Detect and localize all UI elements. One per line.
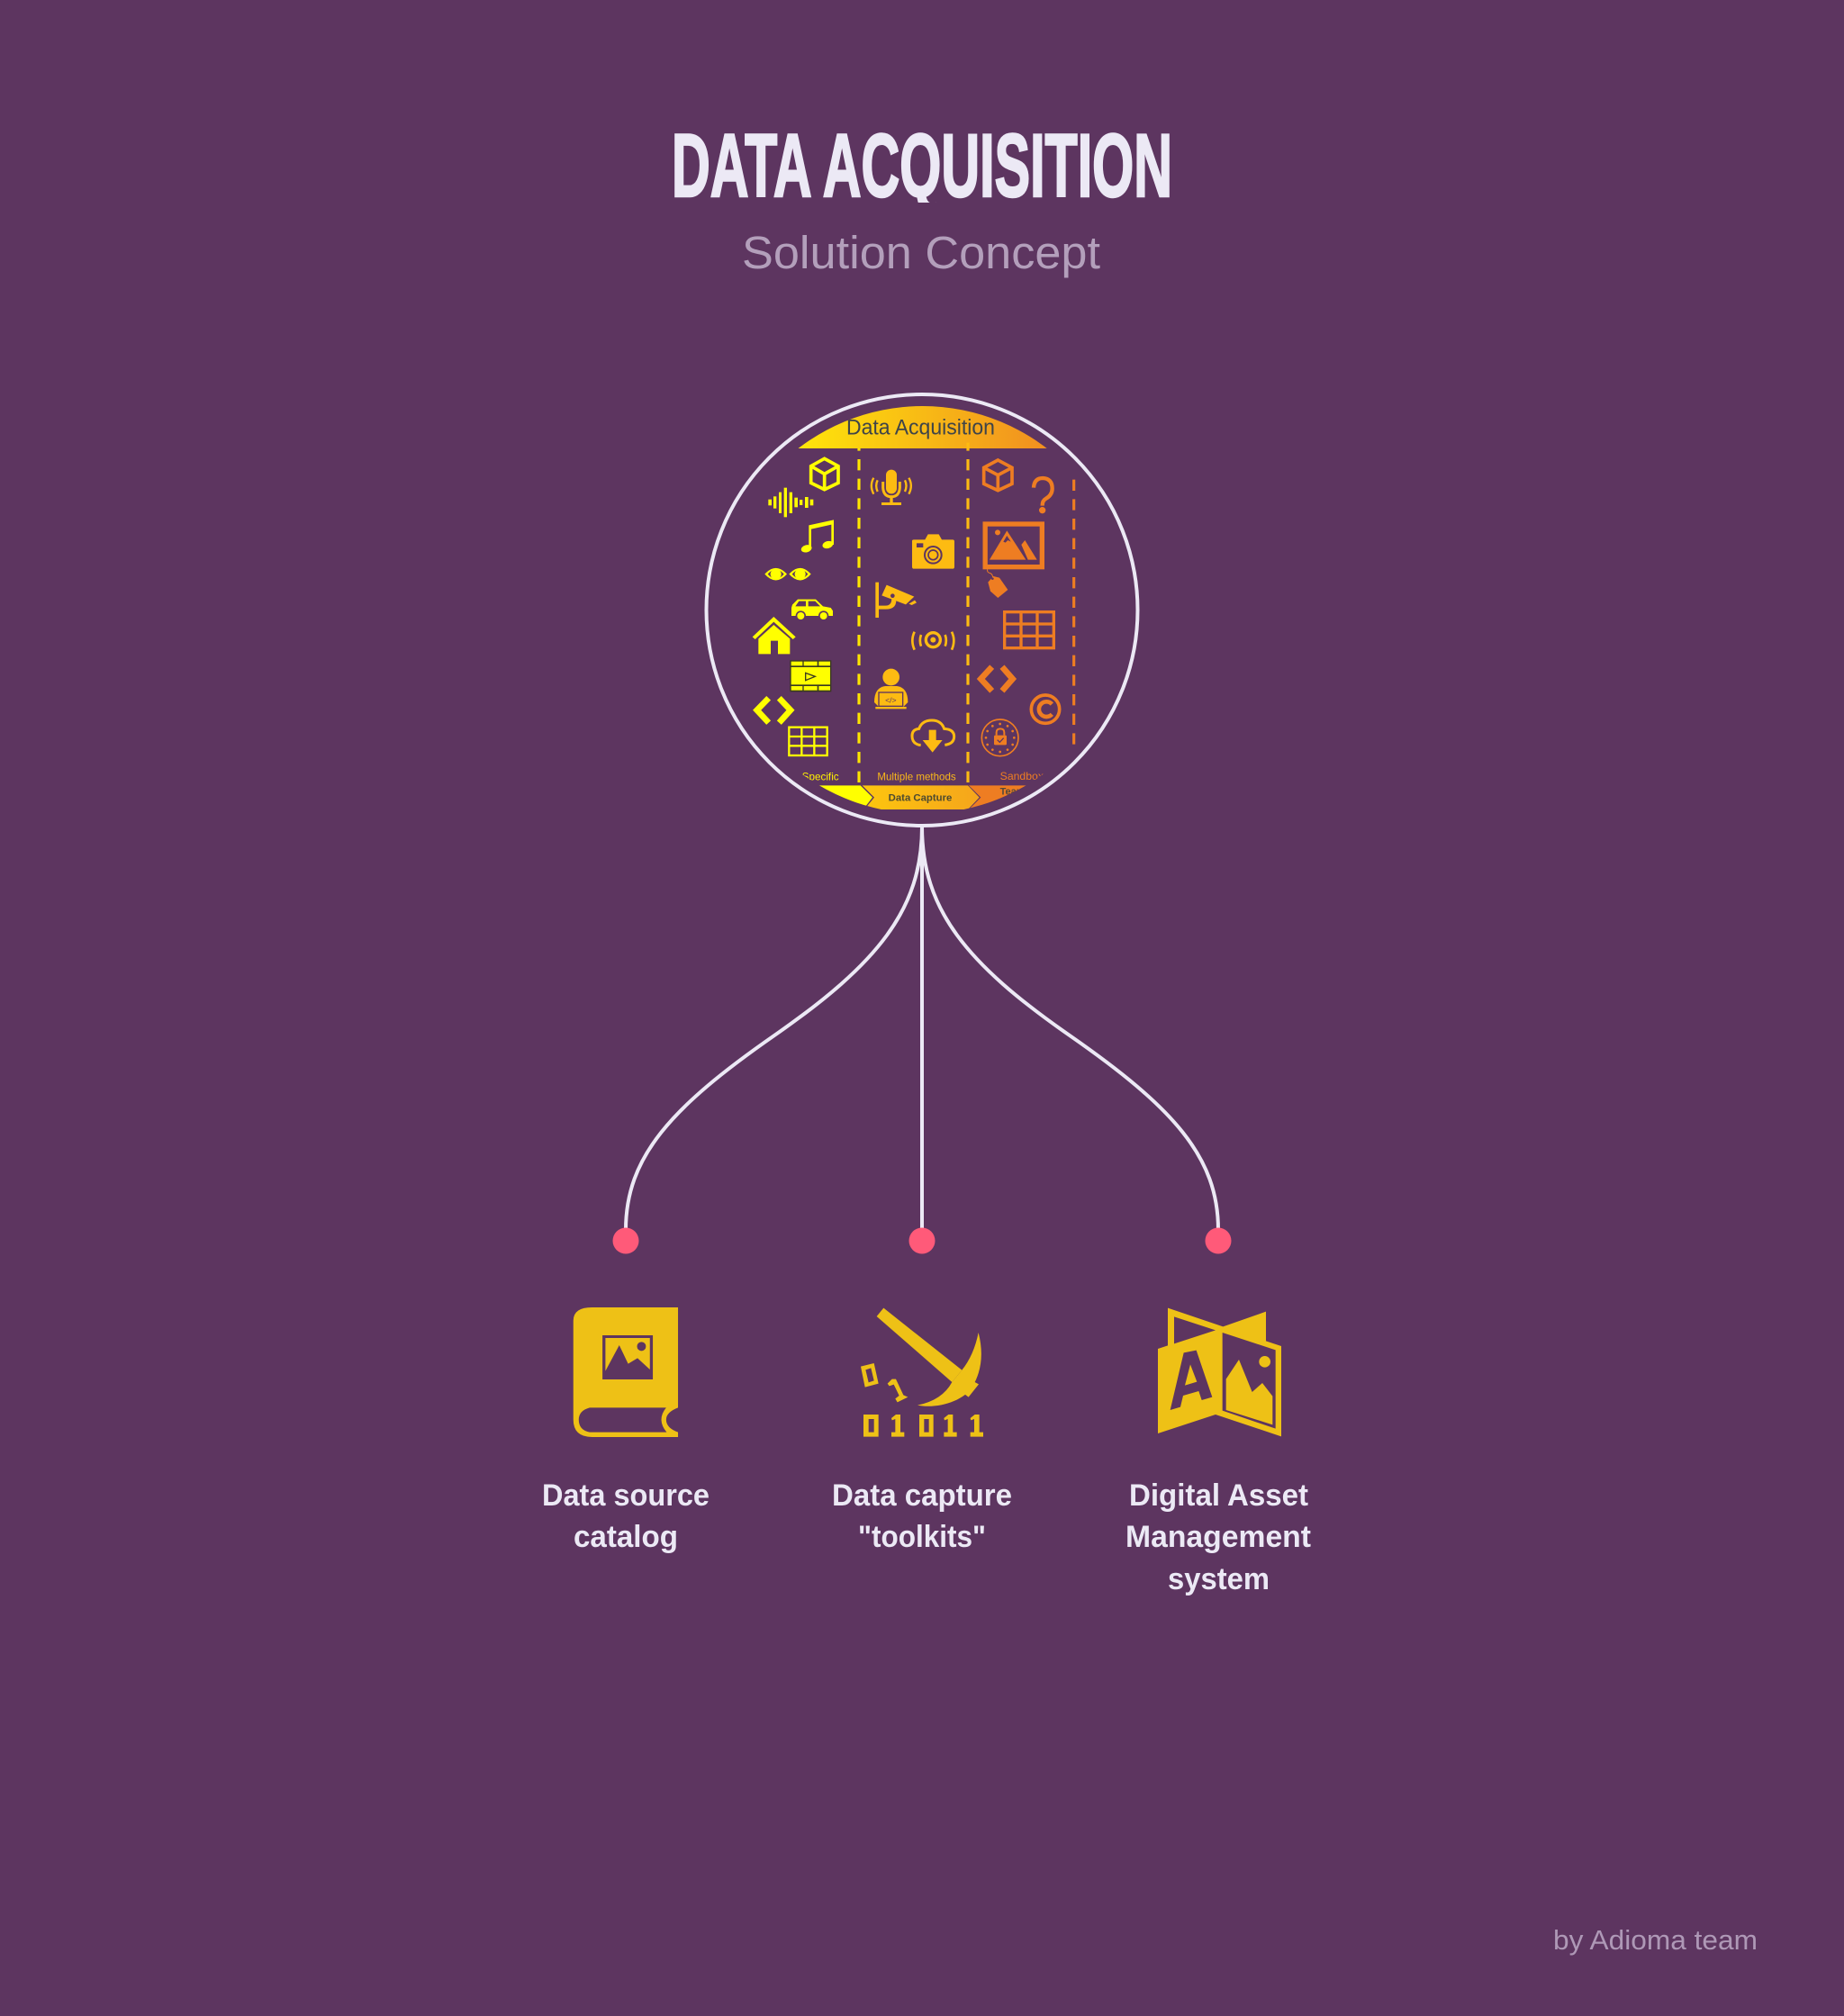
icon: developer at laptop: </> bbox=[885, 696, 897, 705]
icon: question mark bbox=[1034, 478, 1053, 513]
column: multiple methods icons bbox=[872, 470, 954, 753]
icon: camera bbox=[912, 534, 954, 569]
column captions: Multiple methods bbox=[877, 772, 956, 783]
icons row bbox=[574, 1307, 1281, 1437]
label: data capture toolkits: Data capture bbox=[832, 1478, 1012, 1513]
banner bbox=[798, 406, 1046, 448]
icon: security camera bbox=[875, 583, 917, 618]
banner: Data Acquisition bbox=[846, 416, 995, 440]
icon: table bbox=[1005, 612, 1053, 648]
icon: film strip bbox=[790, 660, 831, 692]
magnifier circle: data acquisition diagram bbox=[706, 394, 1138, 826]
column captions bbox=[803, 773, 1043, 782]
connector lines bbox=[626, 827, 1218, 1230]
label: digital asset management system: system bbox=[1168, 1562, 1270, 1596]
diagram artwork bbox=[753, 406, 1075, 809]
column captions: Specific bbox=[802, 772, 839, 783]
icon: table bbox=[789, 728, 827, 755]
middle divider bbox=[966, 443, 970, 782]
icon: price tag bbox=[988, 569, 1008, 598]
column captions: Sandbox bbox=[1000, 771, 1044, 782]
column: sandbox icons bbox=[981, 460, 1060, 756]
label: data capture toolkits: "toolkits" bbox=[858, 1520, 986, 1554]
subtitle: Solution Concept bbox=[742, 227, 1100, 278]
column: specific icons bbox=[753, 458, 838, 755]
icon: cube bbox=[811, 458, 838, 490]
chevron bars: Team bbox=[1000, 787, 1026, 798]
icon: code brackets bbox=[757, 698, 791, 723]
label: digital asset management system: Management bbox=[1125, 1520, 1311, 1554]
icon: developer at laptop bbox=[874, 669, 908, 709]
icon: framed image bbox=[985, 524, 1042, 567]
label: digital asset management system: Digital Asset bbox=[1129, 1478, 1308, 1513]
icon: music note bbox=[800, 520, 834, 554]
icon: eyes bbox=[764, 568, 811, 580]
label: digital asset management system bbox=[1125, 1478, 1311, 1596]
icon: house bbox=[753, 617, 796, 654]
icon: catalog book bbox=[574, 1307, 678, 1437]
icon: broadcast signal bbox=[912, 632, 954, 650]
icon: waveform bbox=[768, 488, 813, 517]
label: data source catalog: catalog bbox=[574, 1520, 678, 1554]
icon: digital asset map bbox=[1158, 1308, 1281, 1436]
footer credit: by Adioma team bbox=[1553, 1924, 1758, 1956]
icon: microphone bbox=[872, 470, 911, 505]
icon: cloud download bbox=[912, 720, 954, 753]
icon: pickaxe with binary bbox=[861, 1308, 983, 1437]
column dividers bbox=[859, 448, 1074, 783]
chevron bars bbox=[819, 785, 1026, 809]
icon: car bbox=[791, 600, 833, 621]
chevron bars: Data Capture bbox=[889, 792, 952, 803]
icon: copyright bbox=[1031, 695, 1060, 723]
label: data source catalog: Data source bbox=[542, 1478, 710, 1513]
label: data capture toolkits bbox=[832, 1478, 1012, 1554]
label: data source catalog bbox=[542, 1478, 710, 1554]
marker dots bbox=[612, 1228, 1232, 1253]
icon: data protection seal bbox=[981, 719, 1018, 756]
icon: code brackets bbox=[981, 667, 1013, 691]
title: DATA ACQUISITION bbox=[672, 115, 1172, 215]
icon: cube bbox=[984, 460, 1012, 491]
